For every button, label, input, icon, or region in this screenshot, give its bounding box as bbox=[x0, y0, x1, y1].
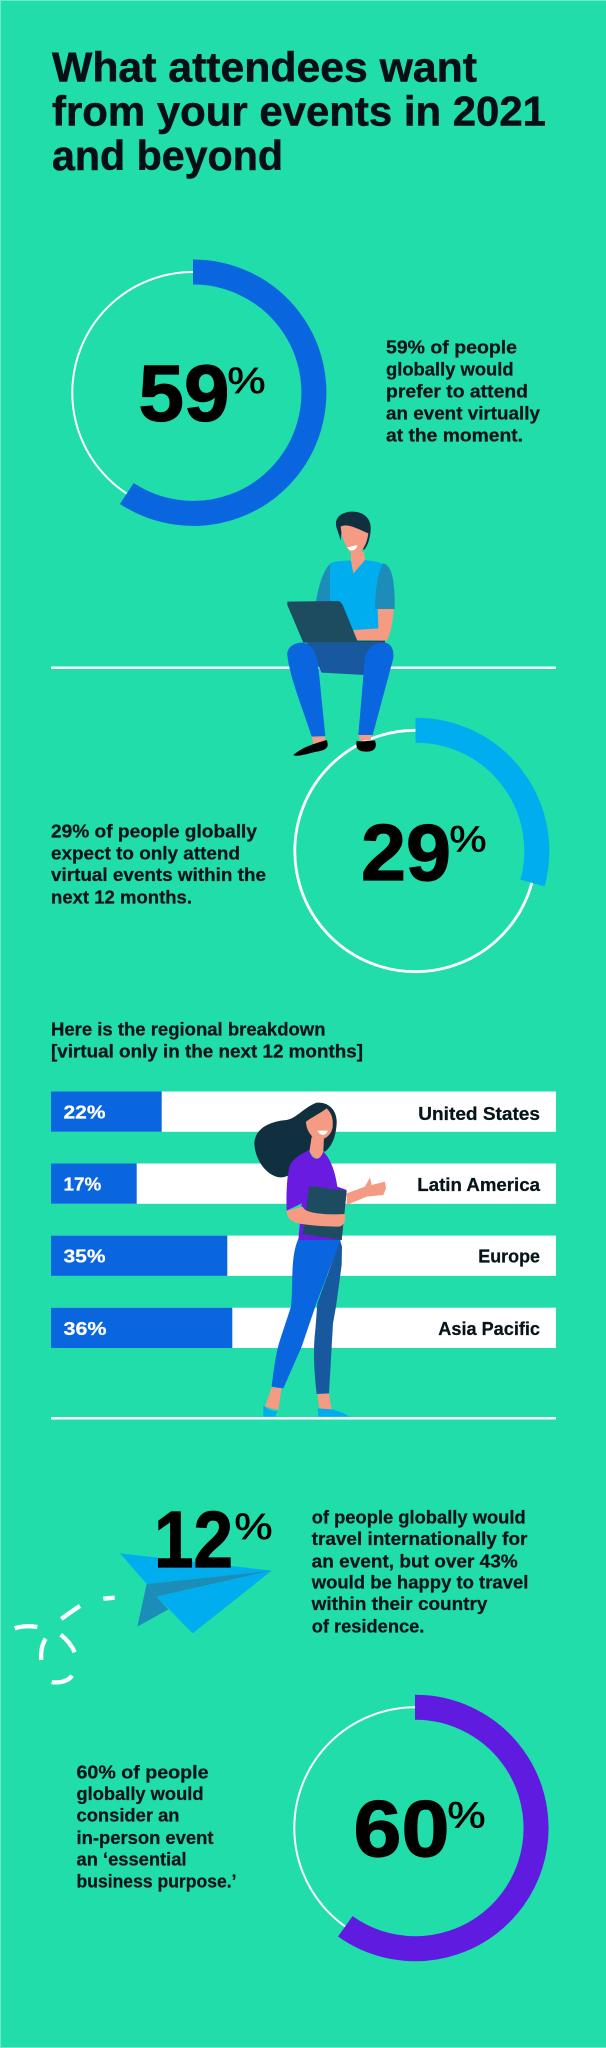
bar: Latin America: 17% bbox=[64, 1174, 101, 1195]
text block: 59% virtual preference: 59% of people bbox=[386, 337, 517, 358]
title bbox=[52, 43, 546, 179]
donut chart: 29%: % bbox=[450, 819, 486, 860]
stat: 12%: 12 bbox=[154, 1495, 233, 1584]
donut chart: 59%: % bbox=[228, 360, 266, 401]
text block: 60% in-person: business purpose.’ bbox=[76, 1870, 236, 1891]
bar: Asia Pacific: 36% bbox=[64, 1318, 106, 1339]
text block: 60% in-person: globally would bbox=[76, 1783, 204, 1804]
title: What attendees want bbox=[52, 43, 477, 90]
bar: Asia Pacific bbox=[51, 1308, 556, 1348]
bar: Asia Pacific: Asia Pacific bbox=[438, 1318, 540, 1339]
title: and beyond bbox=[52, 132, 283, 179]
text block: 60% in-person: 60% of people bbox=[76, 1761, 208, 1782]
heading: regional breakdown: [virtual only in the next 12 months] bbox=[51, 1040, 363, 1061]
stat: 12%: % bbox=[234, 1506, 272, 1547]
text block: 29% virtual only bbox=[51, 821, 266, 907]
text block: 12% travel: travel internationally for bbox=[312, 1528, 527, 1549]
donut chart: 60%: % bbox=[448, 1795, 486, 1836]
donut chart: 59% bbox=[72, 272, 314, 513]
text block: 12% travel: of people globally would bbox=[312, 1506, 526, 1527]
bar: Latin America: Latin America bbox=[417, 1174, 541, 1195]
illustration: man with laptop bbox=[287, 512, 395, 756]
text block: 12% travel: an event, but over 43% bbox=[312, 1550, 518, 1571]
bar: Europe: Europe bbox=[478, 1246, 540, 1267]
text block: 59% virtual preference: globally would bbox=[386, 359, 514, 380]
bar: Europe: 35% bbox=[64, 1246, 106, 1267]
bar: United States: United States bbox=[418, 1103, 540, 1124]
text block: 29% virtual only: next 12 months. bbox=[51, 886, 192, 907]
text block: 60% in-person bbox=[76, 1761, 236, 1891]
text block: 60% in-person: an ‘essential bbox=[76, 1849, 186, 1870]
illustration: woman with clipboard bbox=[254, 1103, 386, 1417]
heading: regional breakdown bbox=[51, 1019, 363, 1061]
bar chart: regional breakdown bbox=[51, 1092, 556, 1348]
text block: 29% virtual only: virtual events within the bbox=[51, 864, 266, 885]
text block: 12% travel bbox=[311, 1506, 528, 1636]
text block: 59% virtual preference: an event virtually bbox=[386, 403, 541, 424]
text block: 59% virtual preference: at the moment. bbox=[386, 424, 523, 445]
donut chart: 59%: 59 bbox=[138, 349, 230, 438]
donut chart: 29%: 29 bbox=[361, 808, 451, 897]
donut chart: 60%: 60 bbox=[354, 1784, 450, 1873]
text block: 12% travel: within their country bbox=[311, 1593, 488, 1614]
text block: 60% in-person: consider an bbox=[76, 1805, 180, 1826]
text block: 29% virtual only: 29% of people globally bbox=[51, 821, 258, 842]
bar: Latin America bbox=[51, 1164, 556, 1204]
text block: 59% virtual preference bbox=[386, 337, 541, 445]
bar: United States: 22% bbox=[64, 1101, 106, 1122]
bar: United States bbox=[51, 1092, 556, 1132]
donut chart: 60% bbox=[294, 1707, 536, 1949]
text block: 29% virtual only: expect to only attend bbox=[51, 842, 240, 863]
text block: 59% virtual preference: prefer to attend bbox=[386, 380, 528, 402]
text block: 60% in-person: in-person event bbox=[76, 1827, 214, 1848]
title: from your events in 2021 bbox=[52, 88, 546, 135]
illustration: paper plane with dashed trail bbox=[15, 1553, 272, 1682]
heading: regional breakdown: Here is the regional breakdown bbox=[51, 1019, 326, 1040]
text block: 12% travel: of residence. bbox=[312, 1615, 424, 1636]
donut chart: 29% bbox=[295, 730, 537, 972]
text block: 12% travel: would be happy to travel bbox=[311, 1572, 528, 1593]
bar: Europe bbox=[51, 1236, 556, 1276]
